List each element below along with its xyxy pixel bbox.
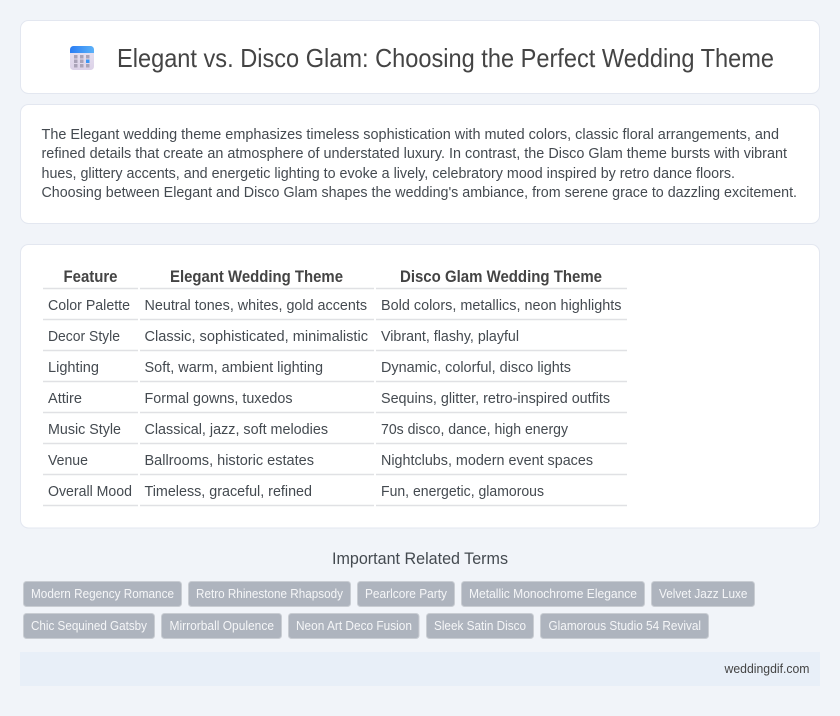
text block: intro paragraph: [42, 127, 797, 201]
row: music style: 70s disco, dance, high energy: [381, 422, 569, 438]
row: music style: Music Style: [48, 422, 121, 438]
row: lighting: Soft, warm, ambient lighting: [144, 360, 323, 376]
footer site name: weddingdif.com: [724, 661, 810, 676]
panel: description: [20, 104, 820, 224]
tag: [540, 614, 708, 638]
row: music style: Classical, jazz, soft melodies: [144, 422, 328, 438]
tag: [162, 614, 282, 638]
text block: intro paragraph: hues, glittery accents, and energetic lighting to evoke a lively, celebratory mood inspired by retro dance floors.: [42, 166, 735, 182]
row: attire: [48, 391, 610, 407]
related terms tags: [24, 582, 754, 638]
tag: Retro Rhinestone Rhapsody: [196, 587, 344, 601]
row: lighting: Lighting: [48, 360, 99, 376]
tag: Metallic Monochrome Elegance: [469, 587, 637, 601]
row: venue: Venue: [48, 453, 88, 469]
icon: calendar: [70, 46, 94, 70]
row: overall mood: [48, 484, 544, 500]
table header row: Disco Glam Wedding Theme: [400, 268, 602, 286]
row: attire: Sequins, glitter, retro-inspired outfits: [381, 391, 610, 407]
row: venue: [48, 453, 593, 469]
row: color palette: Color Palette: [48, 298, 130, 314]
footer bar: [20, 652, 820, 686]
tag: Velvet Jazz Luxe: [659, 587, 748, 601]
tag: Modern Regency Romance: [31, 587, 174, 601]
tag: [24, 614, 154, 638]
tag: Mirrorball Opulence: [170, 619, 274, 633]
tag: [652, 582, 754, 606]
tag: Sleek Satin Disco: [434, 619, 526, 633]
tag: Neon Art Deco Fusion: [296, 619, 412, 633]
row: decor style: Vibrant, flashy, playful: [381, 329, 519, 345]
row: attire: Formal gowns, tuxedos: [144, 391, 292, 407]
title: Elegant vs. Disco Glam: Choosing the Perfect Wedding Theme: [117, 43, 774, 73]
row: overall mood: Overall Mood: [48, 484, 132, 500]
row: color palette: Bold colors, metallics, neon highlights: [381, 298, 622, 314]
row: color palette: Neutral tones, whites, gold accents: [144, 298, 367, 314]
table header row: [64, 268, 602, 286]
panel: title header: [20, 20, 820, 94]
tag: [188, 582, 350, 606]
text block: intro paragraph: refined details that create an atmosphere of understated luxury. In contrast, the Disco Glam theme bursts with vibrant: [42, 146, 787, 162]
tag: Glamorous Studio 54 Revival: [548, 619, 701, 633]
row: color palette: [48, 298, 622, 314]
tag: [358, 582, 454, 606]
tag: [288, 614, 419, 638]
text block: intro paragraph: Choosing between Elegant and Disco Glam shapes the wedding's ambiance, from serene grace to dazzling excitement.: [42, 185, 797, 201]
row: venue: Nightclubs, modern event spaces: [381, 453, 593, 469]
row: lighting: Dynamic, colorful, disco lights: [381, 360, 571, 376]
row: decor style: Decor Style: [48, 329, 120, 345]
tag: [426, 614, 534, 638]
row: decor style: Classic, sophisticated, minimalistic: [144, 329, 369, 345]
panel: comparison table: [20, 244, 820, 528]
text block: intro paragraph: The Elegant wedding theme emphasizes timeless sophistication with muted colors, classic floral arrangements, and: [42, 127, 779, 143]
row: attire: Attire: [48, 391, 82, 407]
table header row: Elegant Wedding Theme: [170, 268, 343, 286]
tag: [24, 582, 182, 606]
row: overall mood: Timeless, graceful, refined: [144, 484, 312, 500]
tag: Pearlcore Party: [365, 587, 448, 601]
heading: important related terms: Important Related Terms: [332, 550, 508, 568]
row: overall mood: Fun, energetic, glamorous: [381, 484, 544, 500]
tag: [462, 582, 644, 606]
row: lighting: [48, 360, 571, 376]
tag: Chic Sequined Gatsby: [31, 619, 148, 633]
row: venue: Ballrooms, historic estates: [144, 453, 314, 469]
row: music style: [48, 422, 569, 438]
table header row: Feature: [64, 268, 118, 286]
row: decor style: [48, 329, 519, 345]
